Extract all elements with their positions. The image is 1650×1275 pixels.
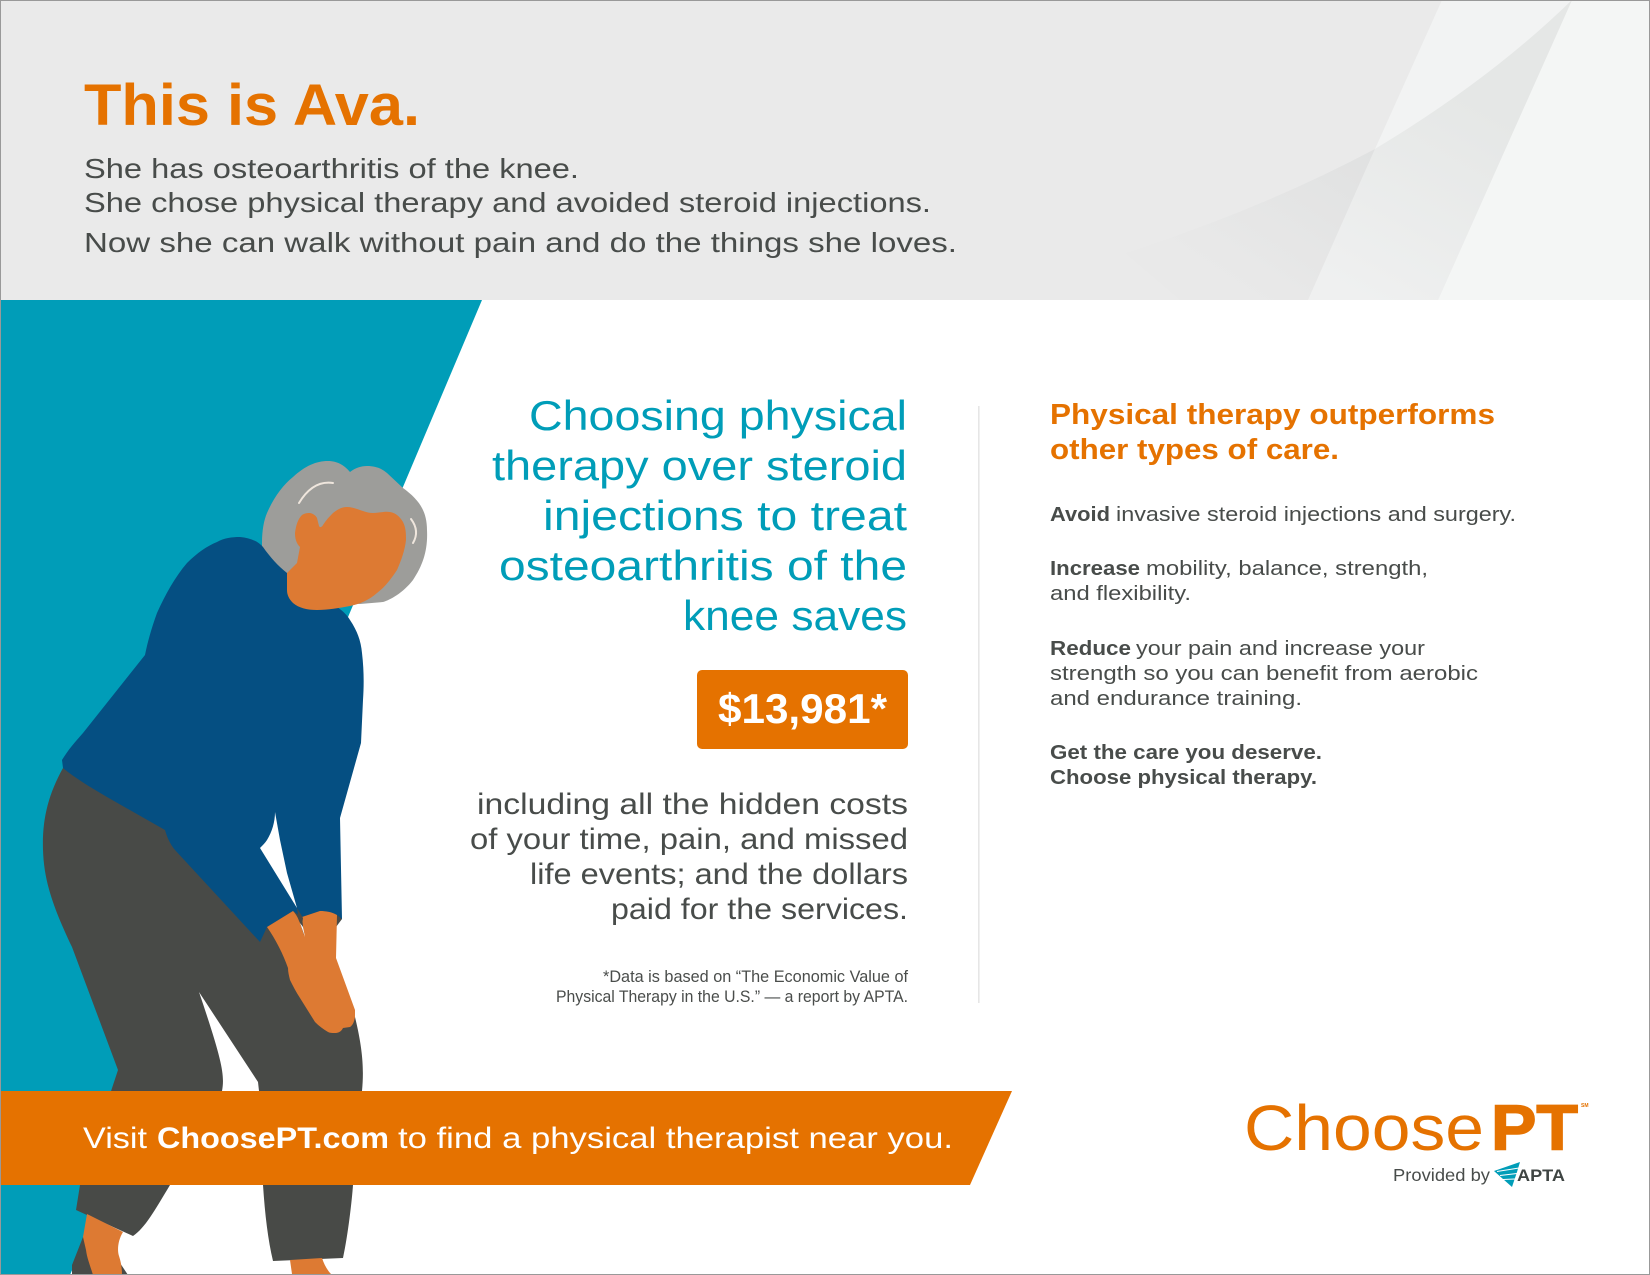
- text block: call to action: [1050, 741, 1322, 789]
- headline: savings statement: therapy over steroid: [492, 442, 907, 489]
- banner: visit website: ChoosePT.com: [157, 1122, 389, 1155]
- banner: visit website: [0, 1091, 1012, 1185]
- logo: ChoosePT provided by APTA: SM: [1581, 1103, 1588, 1109]
- title: This is Ava.: [84, 73, 420, 138]
- headline: savings statement: osteoarthritis of the: [499, 542, 907, 589]
- text block: reduce: and endurance training.: [1050, 687, 1302, 710]
- headline: savings statement: Choosing physical: [529, 392, 907, 439]
- headline: savings statement: injections to treat: [543, 492, 907, 539]
- text block: introduction: [84, 153, 957, 258]
- sweater: [62, 537, 364, 942]
- text block: introduction: Now she can walk without pain and do the things she loves.: [84, 227, 957, 258]
- text block: hidden costs: [470, 788, 908, 926]
- pants: [43, 768, 363, 1261]
- shadow between hands: [297, 908, 303, 925]
- left shoe: [72, 1237, 128, 1275]
- logo: ChoosePT provided by APTA: PT: [1491, 1092, 1578, 1164]
- footnote: *Data is based on “The Economic Value of: [603, 968, 908, 986]
- face: [287, 507, 406, 610]
- text block: call to action: Choose physical therapy.: [1050, 766, 1317, 789]
- text block: introduction: She chose physical therapy and avoided steroid injections.: [84, 187, 931, 218]
- text block: reduce: your pain and increase your: [1136, 637, 1425, 660]
- text block: reduce: [1050, 637, 1478, 710]
- left foot: [83, 1214, 123, 1275]
- text block: increase: and flexibility.: [1050, 582, 1191, 605]
- headline: savings statement: knee saves: [683, 592, 907, 639]
- gap between hands: [300, 923, 305, 937]
- heading: benefits: other types of care.: [1050, 434, 1339, 466]
- footnote: [556, 968, 908, 1006]
- banner: visit website: Visit: [83, 1122, 148, 1155]
- text block: increase: mobility, balance, strength,: [1146, 557, 1428, 580]
- logo: ChoosePT provided by APTA: [1244, 1092, 1588, 1187]
- logo: ChoosePT provided by APTA: Provided by: [1393, 1165, 1490, 1185]
- icon: APTA mark: [1494, 1162, 1520, 1187]
- illustration: Ava holding her knee: [43, 461, 427, 1275]
- heading: benefits: [1050, 399, 1495, 466]
- text block: increase: Increase: [1050, 557, 1140, 580]
- text block: avoid: invasive steroid injections and surgery.: [1116, 503, 1516, 526]
- hair: [262, 461, 427, 604]
- text block: reduce: Reduce: [1050, 637, 1131, 660]
- banner: visit website: to find a physical therapist near you.: [398, 1122, 953, 1155]
- hair highlight: [299, 483, 333, 503]
- hands: [267, 911, 355, 1033]
- text block: increase: [1050, 557, 1428, 605]
- gap between arm and body: [260, 812, 297, 908]
- panel: header background: [0, 0, 1650, 300]
- panel: teal background shape: [0, 300, 482, 1275]
- logo: ChoosePT provided by APTA: Choose: [1244, 1092, 1484, 1164]
- text block: reduce: strength so you can benefit from aerobic: [1050, 662, 1478, 685]
- hair highlight: [411, 519, 416, 543]
- text block: avoid: Avoid: [1050, 503, 1110, 526]
- text block: hidden costs: life events; and the dollars: [530, 858, 908, 891]
- right foot: [290, 1258, 331, 1274]
- text block: introduction: She has osteoarthritis of the knee.: [84, 153, 579, 184]
- text block: hidden costs: paid for the services.: [611, 893, 908, 926]
- callout: savings amount: [697, 670, 908, 749]
- logo: ChoosePT provided by APTA: APTA: [1517, 1166, 1565, 1185]
- text block: call to action: Get the care you deserve.: [1050, 741, 1322, 764]
- text block: hidden costs: of your time, pain, and missed: [470, 823, 908, 856]
- heading: benefits: Physical therapy outperforms: [1050, 399, 1495, 431]
- text block: hidden costs: including all the hidden costs: [477, 788, 908, 821]
- headline: savings statement: [492, 392, 907, 639]
- footnote: Physical Therapy in the U.S.” — a report by APTA.: [556, 988, 908, 1006]
- callout: savings amount: $13,981*: [718, 685, 888, 732]
